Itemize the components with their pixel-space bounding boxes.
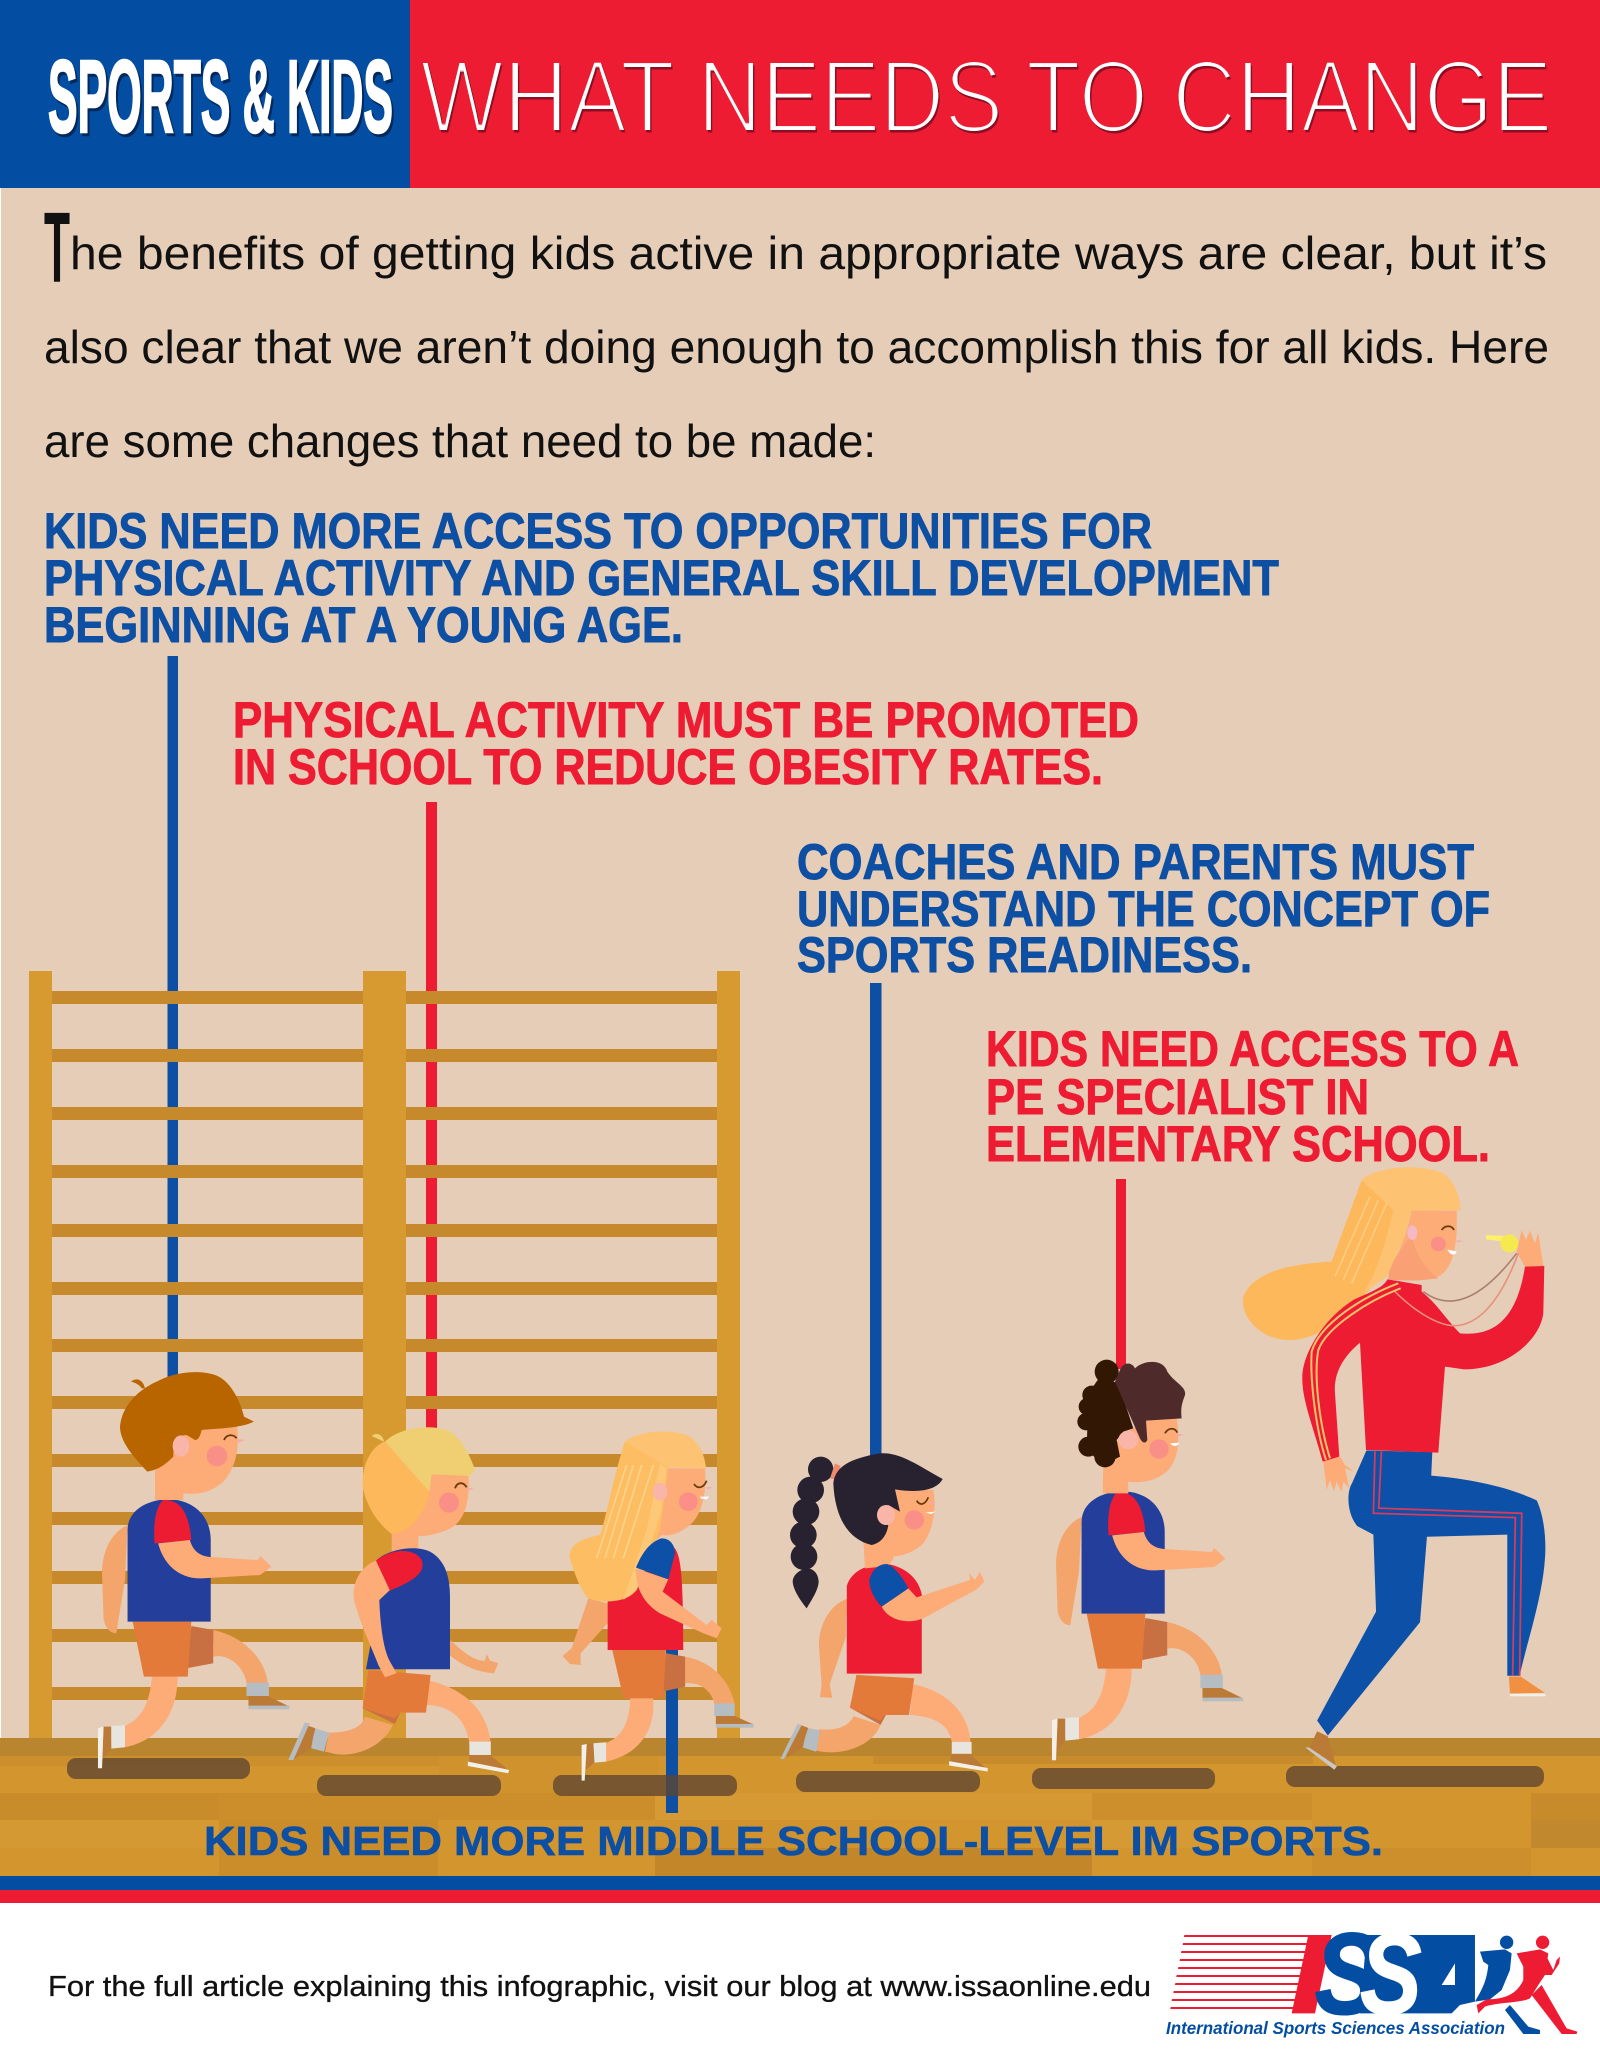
logo: ISSA [1166,1910,1577,2038]
connector line: kid two [426,802,437,1482]
blond girl legs [582,1650,754,1781]
intro text lines: also clear that we aren’t doing enough to accomplish this for all kids. Here [44,321,1549,373]
header band: SPORTS & KIDS [48,39,393,154]
logo wordmark: International Sports Sciences Association [1166,2018,1505,2038]
heading: more access: BEGINNING AT A YOUNG AGE. [44,597,683,653]
page background [1,188,1600,1748]
floor shadows [67,1758,1544,1796]
intro text lines: are some changes that need to be made: [44,415,876,467]
heading: PE specialist: KIDS NEED ACCESS TO A [986,1021,1519,1077]
braid girl lower body [780,1564,988,1771]
heading: sports readiness: SPORTS READINESS. [797,927,1252,983]
gym floor [0,1738,1600,1876]
figure: coach with whistle [1243,1167,1545,1770]
logo block letters: S [1315,1910,1380,2038]
connector line: kid one [168,656,178,1396]
title: sports and kids [48,39,395,157]
connector line: kid four [870,983,882,1458]
logo block letters [1315,1910,1475,2038]
header band: SPORTS & KIDS [50,42,395,157]
heading: more access: KIDS NEED MORE ACCESS TO OPPORTUNITIES FOR [44,503,1152,559]
heading: more access [44,503,1279,653]
heading: middle school sports: KIDS NEED MORE MIDDLE SCHOOL-LEVEL IM SPORTS. [204,1818,1383,1864]
figure: curly haired child [1052,1360,1243,1760]
heading: promote in school: PHYSICAL ACTIVITY MUST BE PROMOTED [233,692,1139,748]
boy body [98,1499,289,1768]
connector line: kid five [1116,1179,1126,1369]
blond boy legs [288,1680,509,1773]
heading: promote in school: IN SCHOOL TO REDUCE OBESITY RATES. [233,739,1103,795]
logo red runner [1477,1936,1577,2034]
coach upper body [1243,1167,1544,1492]
heading: promote in school [233,692,1139,795]
blond girl upper body [563,1432,722,1665]
child curly hair and face [1077,1360,1185,1493]
figure: boy with brown hair [98,1372,289,1768]
wall bars [29,971,740,1741]
header red block [410,0,1600,188]
header band [0,0,1600,188]
intro text lines [44,227,1549,467]
heading: more access: PHYSICAL ACTIVITY AND GENERAL SKILL DEVELOPMENT [44,550,1279,606]
boy head [120,1372,254,1500]
child body [1052,1491,1243,1760]
heading: sports readiness: COACHES AND PARENTS MUST [797,834,1474,890]
figure: girl with black braid [780,1453,988,1771]
logo speed stripes [1170,1935,1332,2013]
header blue block [0,0,410,188]
footer text: For the full article explaining this infographic, visit our blog at www.issaonline.edu [48,1971,1151,2003]
intro paragraph [44,192,1549,467]
logo blue runner [1475,1936,1540,2034]
heading: PE specialist: ELEMENTARY SCHOOL. [986,1116,1490,1172]
coach trousers and feet [1305,1450,1545,1770]
heading: PE specialist [986,1021,1519,1172]
intro text lines: he benefits of getting kids active in appropriate ways are clear, but it’s [70,227,1547,279]
footer stripes [0,1876,1600,1903]
connector line: middle school [666,1650,678,1813]
figure: girl with long blond hair [563,1432,754,1781]
logo block letters: S [1360,1910,1422,2038]
heading: sports readiness [797,834,1490,983]
heading: sports readiness: UNDERSTAND THE CONCEPT OF [797,881,1490,937]
heading: PE specialist: PE SPECIALIST IN [986,1069,1369,1125]
blond boy upper body [354,1427,498,1724]
figure: blond boy [288,1427,509,1773]
intro paragraph: T [44,192,70,304]
braid girl head and arm [790,1453,984,1621]
